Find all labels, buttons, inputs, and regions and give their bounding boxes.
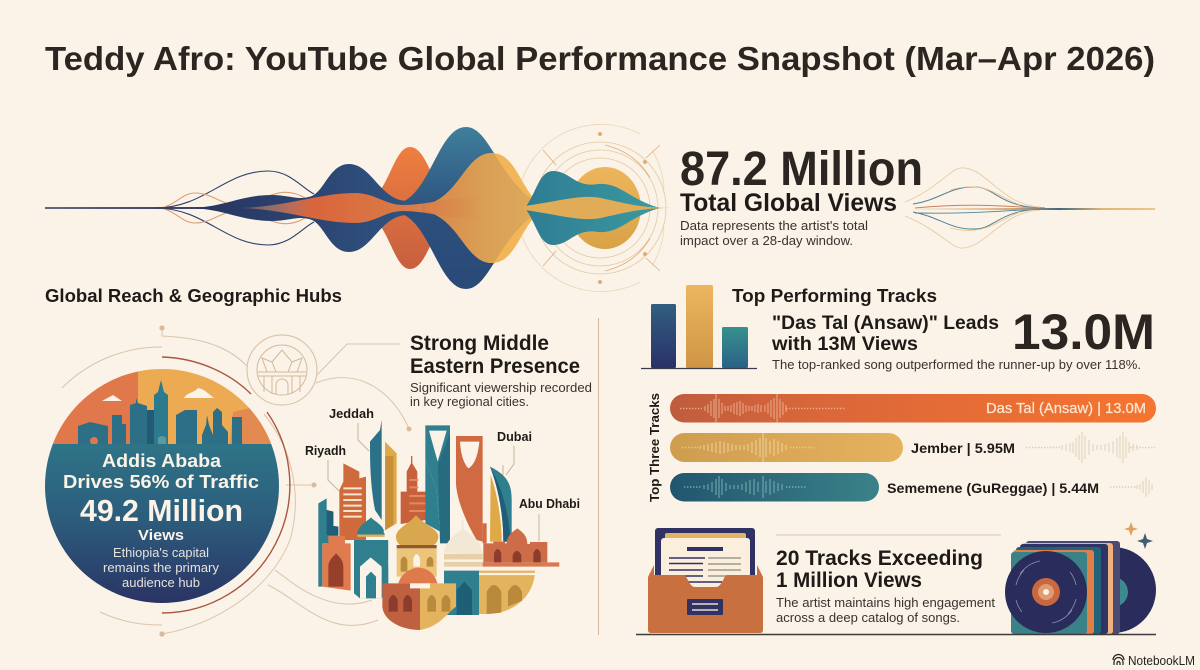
stat: 13.0M: 13.0M <box>1012 304 1155 360</box>
thin wave lines <box>155 171 314 245</box>
text: Middle East: Eastern Presence <box>410 355 580 378</box>
title: Teddy Afro: YouTube Global Performance Snapshot (Mar–Apr 2026) <box>45 41 1155 78</box>
bar: Das Tal <box>670 394 1156 423</box>
text: Middle East: in key regional cities. <box>410 395 529 409</box>
stat: total views: 87.2 Million <box>680 143 923 196</box>
central axis <box>45 207 230 209</box>
city label: Riyadh <box>305 443 346 491</box>
circle: Addis Ababa: Ethiopia's capital <box>113 546 209 560</box>
text: 20 tracks <box>776 535 1001 625</box>
heading: global reach: Global Reach & Geographic Hubs <box>45 285 342 306</box>
text: lead track: with 13M Views <box>771 333 918 355</box>
blue tall peak <box>395 127 540 289</box>
city label: Riyadh: Riyadh <box>305 443 346 458</box>
icon: landmark medallion <box>247 335 317 405</box>
right wave tail <box>905 168 1155 248</box>
text: lead track: The top-ranked song outperformed the runner-up by over 118%. <box>772 357 1141 372</box>
gold peak <box>425 153 540 263</box>
text: Middle East: Significant viewership recorded <box>410 381 592 395</box>
axis label: top three tracks: Top Three Tracks <box>647 393 662 502</box>
illustration: Gulf skyline <box>318 420 559 630</box>
circle: Addis Ababa: 49.2 Million <box>80 493 243 528</box>
gold body over blue <box>430 153 530 263</box>
stat: total views: Data represents the artist's total <box>680 218 868 233</box>
circle: Addis Ababa: audience hub <box>122 576 200 590</box>
sound wave hero graphic <box>45 124 672 292</box>
circle: Addis Ababa: remains the primary <box>103 561 220 575</box>
city label: Dubai: Dubai <box>497 429 532 444</box>
stat: total views <box>680 143 923 248</box>
city label: Abu Dhabi <box>519 496 580 541</box>
heading: top performing tracks: Top Performing Tracks <box>732 285 937 306</box>
text: lead track: "Das Tal (Ansaw)" Leads <box>772 312 999 334</box>
icon: vinyl records <box>1005 522 1156 634</box>
connector lines <box>62 331 409 634</box>
bar: Jember: Jember | 5.95M <box>911 440 1015 456</box>
icon: file folder <box>648 528 763 633</box>
text: 20 tracks: 1 Million Views <box>776 569 922 592</box>
sun disc <box>569 167 641 249</box>
text: 20 tracks: The artist maintains high engagement <box>776 595 995 610</box>
sky and skyline <box>45 369 279 603</box>
text: 20 tracks: 20 Tracks Exceeding <box>776 547 983 570</box>
city label: Dubai <box>497 429 532 475</box>
circle: Addis Ababa <box>45 369 279 603</box>
orange peak <box>372 147 445 269</box>
text: Middle East <box>410 332 592 409</box>
city label: Jeddah <box>329 406 374 451</box>
text: Middle East: Strong Middle <box>410 332 549 355</box>
sparkles <box>1124 522 1138 536</box>
text: lead track <box>771 312 1141 372</box>
bar: Sememene: Sememene (GuReggae) | 5.44M <box>887 480 1099 496</box>
teal lobe <box>527 171 660 245</box>
gold spindle in teal <box>525 197 672 219</box>
inner orange spindle <box>240 193 480 223</box>
circle text: Addis Ababa <box>102 451 222 471</box>
stat: total views: Total Global Views <box>680 189 897 217</box>
circle: Addis Ababa: Drives 56% of Traffic <box>63 472 259 492</box>
city label: Jeddah: Jeddah <box>329 406 374 421</box>
city label: Abu Dhabi: Abu Dhabi <box>519 496 580 511</box>
concentric rings <box>522 124 666 292</box>
bar chart icon <box>641 285 757 368</box>
stat: total views: impact over a 28-day window. <box>680 233 853 248</box>
text: 20 tracks: across a deep catalog of songs. <box>776 610 960 625</box>
NotebookLM logo: NotebookLM <box>1128 654 1195 668</box>
bar: Das Tal: Das Tal (Ansaw) | 13.0M <box>986 401 1146 417</box>
circle: Addis Ababa: Views <box>138 527 184 544</box>
bar: Sememene <box>670 473 1152 502</box>
dark red arcs <box>162 357 290 613</box>
bar: Jember <box>670 432 1155 463</box>
navy left lobe <box>190 164 408 252</box>
